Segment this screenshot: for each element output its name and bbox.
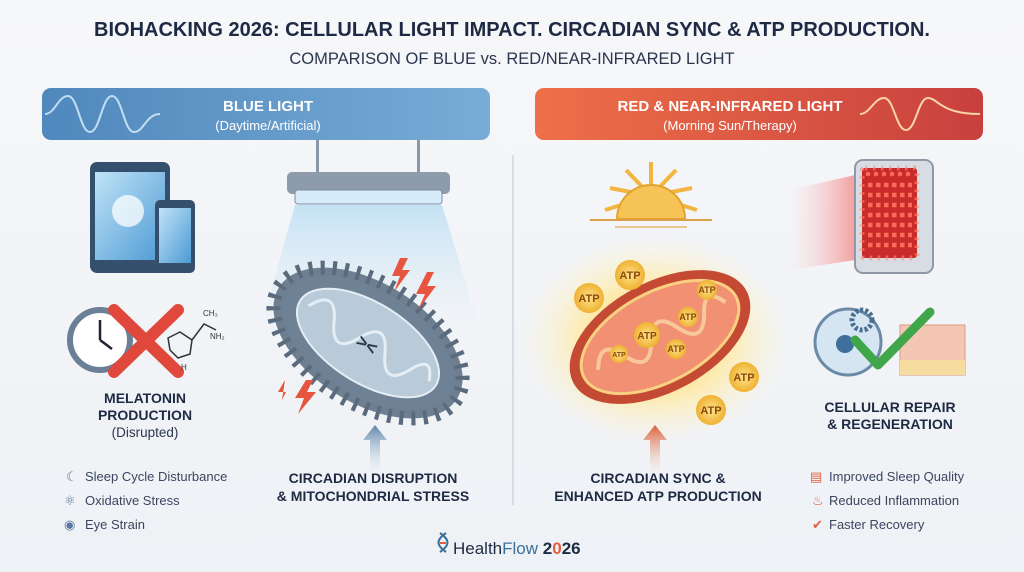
- list: blue light effects: [64, 469, 227, 532]
- list: red light benefits: ▤: [810, 469, 822, 484]
- list: blue light effects: Eye Strain: [85, 517, 145, 532]
- text: melatonin production: [98, 390, 192, 440]
- title: BIOHACKING 2026: CELLULAR LIGHT IMPACT. CIRCADIAN SYNC & ATP PRODUCTION.: [94, 19, 930, 41]
- icon: stressed mitochondrion: [247, 236, 489, 450]
- icon: stressed mitochondrion: ><: [353, 331, 381, 359]
- list: blue light effects: ☾: [66, 469, 78, 484]
- icon: glowing mitochondrion with ATP: [520, 235, 790, 445]
- icon: glowing mitochondrion with ATP: ATP: [619, 270, 641, 282]
- list: red light benefits: Reduced Inflammation: [829, 493, 959, 508]
- list: red light benefits: [810, 469, 965, 532]
- banner: red light: (Morning Sun/Therapy): [663, 118, 797, 133]
- icon: glowing mitochondrion with ATP: ATP: [733, 372, 755, 384]
- arrow: up red: [643, 425, 667, 475]
- arrow: up blue: [363, 425, 387, 475]
- footer logo: [438, 533, 581, 558]
- text: melatonin production: PRODUCTION: [98, 407, 192, 423]
- text: melatonin production: MELATONIN: [104, 390, 186, 406]
- text: circadian disruption: CIRCADIAN DISRUPTION: [289, 470, 457, 486]
- icon: clock with X and melatonin molecule: H: [181, 363, 187, 372]
- subtitle: COMPARISON OF BLUE vs. RED/NEAR-INFRARED LIGHT: [289, 50, 735, 68]
- banner: red light: RED & NEAR-INFRARED LIGHT: [618, 98, 842, 115]
- icon: glowing mitochondrion with ATP: ATP: [637, 331, 657, 342]
- banner: blue light: BLUE LIGHT: [223, 98, 313, 115]
- list: blue light effects: ⚛: [64, 493, 76, 508]
- text: melatonin production: (Disrupted): [112, 425, 178, 440]
- icon: sun: [590, 162, 712, 227]
- text: cellular repair: & REGENERATION: [827, 416, 953, 432]
- list: red light benefits: Improved Sleep Quality: [829, 469, 965, 484]
- list: red light benefits: ✔: [812, 517, 823, 532]
- icon: lightning bolts: [278, 258, 436, 414]
- banner: blue light: [42, 88, 490, 140]
- text: cellular repair: CELLULAR REPAIR: [824, 399, 956, 415]
- icon: cell repair with check: [815, 309, 965, 375]
- text: circadian sync: CIRCADIAN SYNC &: [590, 470, 726, 486]
- list: blue light effects: Oxidative Stress: [85, 493, 180, 508]
- banner: red light: [535, 88, 983, 140]
- icon: clock with X and melatonin molecule: [70, 309, 225, 372]
- list: red light benefits: Faster Recovery: [829, 517, 925, 532]
- list: blue light effects: ◉: [64, 517, 75, 532]
- banner: blue light: (Daytime/Artificial): [215, 118, 321, 133]
- list: red light benefits: ♨: [812, 493, 824, 508]
- icon: tablet and phone: [90, 162, 195, 273]
- icon: clock with X and melatonin molecule: NH₂: [210, 332, 225, 341]
- icon: glowing mitochondrion with ATP: ATP: [698, 285, 716, 295]
- list: blue light effects: Sleep Cycle Disturbance: [85, 469, 227, 484]
- text: cellular repair: [824, 399, 956, 432]
- text: circadian sync: ENHANCED ATP PRODUCTION: [554, 488, 762, 504]
- text: circadian disruption: & MITOCHONDRIAL STRESS: [277, 488, 469, 504]
- text: circadian sync: [554, 470, 762, 504]
- icon: glowing mitochondrion with ATP: ATP: [667, 344, 685, 354]
- icon: glowing mitochondrion with ATP: ATP: [578, 293, 600, 305]
- icon: clock with X and melatonin molecule: CH₃: [203, 309, 218, 318]
- icon: lamp with light cone: [260, 140, 480, 330]
- icon: glowing mitochondrion with ATP: ATP: [700, 405, 722, 417]
- icon: red light therapy panel: [790, 160, 933, 273]
- text: circadian disruption: [277, 470, 469, 504]
- icon: glowing mitochondrion with ATP: ATP: [612, 352, 626, 359]
- footer logo: HealthFlow 2026: [453, 539, 581, 558]
- icon: glowing mitochondrion with ATP: ATP: [679, 312, 697, 322]
